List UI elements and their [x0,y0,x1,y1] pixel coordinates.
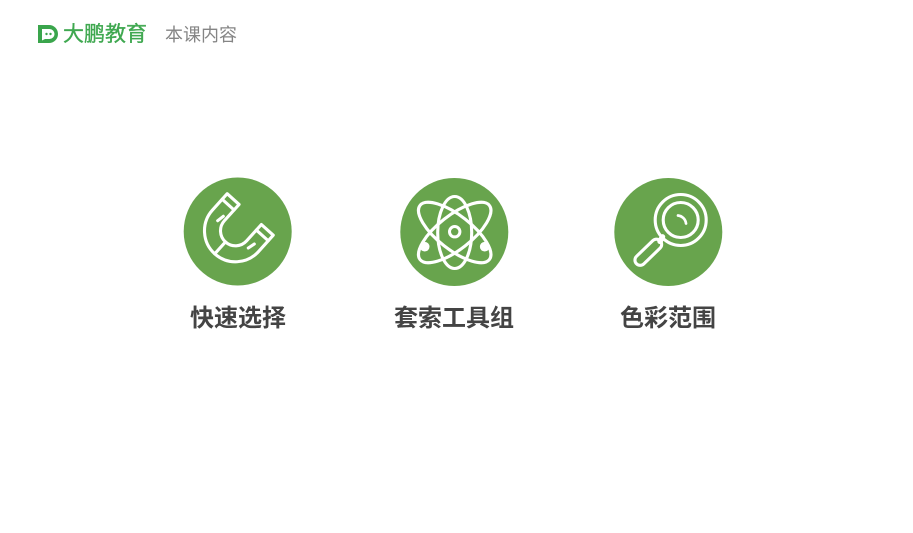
label: quick selection: 快速选择 [190,305,286,332]
brand name: 大鹏教育 [63,23,147,46]
label: color range: 色彩范围 [620,305,716,332]
header section title: 本课内容 [165,25,237,45]
label: lasso tool group: 套索工具组 [394,305,514,332]
